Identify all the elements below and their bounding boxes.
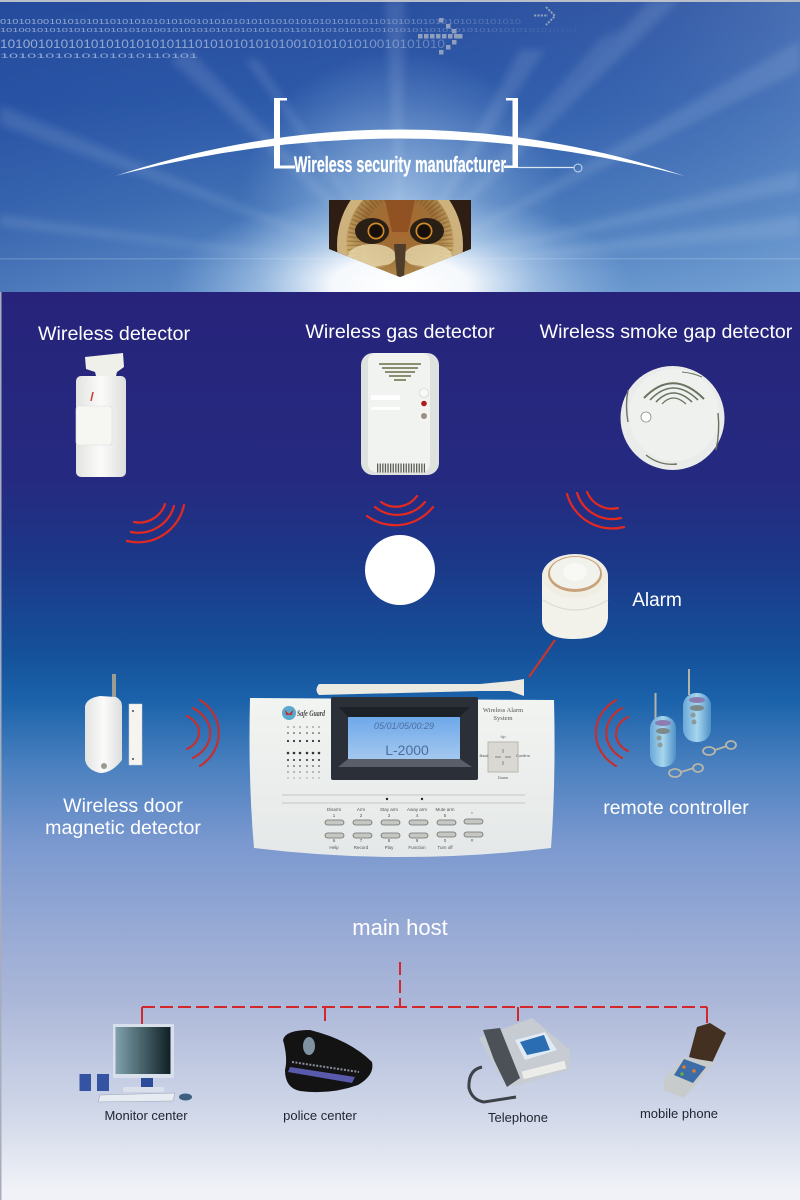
- panel: main host device: 05/01/05/00:29: [374, 721, 434, 731]
- icon: red signal waves: [367, 496, 433, 525]
- panel: mobile phone: [640, 1023, 726, 1121]
- title: wireless security manufacturer: Wireless security manufacturer: [294, 152, 506, 177]
- panel: telephone: [469, 1018, 570, 1125]
- heading: wireless detector: Wireless detector: [38, 323, 190, 345]
- keypad: 6: [333, 838, 336, 843]
- keypad: 0: [444, 838, 447, 843]
- panel: monitor center: [80, 1024, 192, 1123]
- keypad: Stay arm: [380, 807, 398, 812]
- icon: siren: [542, 554, 608, 639]
- icon: dotted arrow decoration: [418, 7, 555, 54]
- icon: red signal waves: [127, 504, 184, 542]
- keypad: 9: [416, 838, 419, 843]
- icon: red signal waves: [567, 492, 624, 528]
- keypad: 1: [333, 813, 336, 818]
- keypad: Mute arm: [435, 807, 455, 812]
- LCD display: [331, 697, 478, 780]
- icon: PIR motion detector: [76, 353, 126, 477]
- panel: wireless detector: [38, 323, 190, 542]
- heading: main host: main host: [352, 915, 448, 940]
- keypad: Arm: [357, 807, 365, 812]
- label: monitor center: Monitor center: [104, 1108, 188, 1123]
- label: telephone: Telephone: [488, 1110, 548, 1125]
- binary code decoration: 1010101010101010110101: [0, 54, 200, 60]
- icon: remote key fobs: [650, 669, 736, 777]
- icon: red signal waves: [187, 700, 219, 766]
- panel: main host device: [250, 679, 555, 940]
- panel: main host device: Up: [500, 734, 506, 739]
- logo: [282, 706, 296, 720]
- heading: wireless smoke gap detector: Wireless smoke gap detector: [540, 321, 793, 343]
- keypad: Record: [354, 845, 369, 850]
- heading: remote controller: remote controller: [603, 797, 749, 819]
- host body: [250, 698, 555, 857]
- keypad: [327, 807, 474, 850]
- panel: wireless gas detector: [305, 321, 495, 525]
- panel: main host device: Safe Guard: [297, 709, 326, 718]
- panel: main host device: Back: [480, 753, 488, 758]
- icon: white center circle: [365, 535, 435, 605]
- keypad: #: [471, 838, 474, 843]
- antenna: [316, 679, 524, 696]
- panel: main dark blue section: [0, 292, 800, 1200]
- keypad: Help: [329, 845, 339, 850]
- panel: remote controller: [596, 669, 749, 819]
- keypad: Turn off: [437, 845, 453, 850]
- icon: owl face: [329, 200, 471, 277]
- icon: mobile phone: [663, 1023, 726, 1098]
- heading: wireless door magnetic detector: magnetic detector: [45, 817, 201, 839]
- keypad: Play: [385, 845, 394, 850]
- keypad: 7: [360, 838, 363, 843]
- navigation pad: [488, 742, 518, 772]
- system label: Wireless Alarm: [483, 707, 523, 714]
- panel: main host device: Confirm: [516, 753, 531, 758]
- icon: smoke detector: [620, 366, 724, 470]
- keypad: Disarm: [327, 807, 341, 812]
- connector line to host: [529, 640, 555, 677]
- connector: red dashed lines: [142, 962, 707, 1024]
- binary code decoration: 10100101010101010101010111010101010101001010101010010101010: [0, 37, 445, 51]
- binary code decoration: 0101010010101010110101010101010010101010101010101010101010101101010101010101010101010: [0, 19, 521, 26]
- brackets: [274, 98, 295, 168]
- keypad: Away arm: [407, 807, 427, 812]
- keypad: 5: [444, 813, 447, 818]
- icon: telephone: [469, 1018, 570, 1102]
- panel: main host device: L-2000: [385, 742, 429, 758]
- keypad: *: [471, 811, 473, 816]
- heading: alarm: Alarm: [632, 590, 682, 611]
- panel: header banner background: [0, 0, 800, 292]
- label: police center: police center: [283, 1108, 358, 1123]
- icon: gas detector: [361, 353, 439, 475]
- icon: door magnetic sensor: [85, 674, 142, 773]
- panel: main host device: Down: [498, 775, 508, 780]
- heading: wireless door magnetic detector: Wireless door: [63, 795, 183, 817]
- binary code decoration: 1010010101010101101010101001010101010101010101011010101010101010101011010101010101010101010101: [0, 28, 578, 34]
- panel: alarm: [529, 554, 682, 677]
- keypad: Function: [408, 845, 426, 850]
- keypad: 2: [360, 813, 363, 818]
- icon: computer: [80, 1024, 192, 1102]
- panel: wireless door magnetic detector: [45, 674, 219, 839]
- white arc: [115, 130, 685, 176]
- heading: wireless gas detector: Wireless gas detector: [305, 321, 495, 343]
- label: mobile phone: mobile phone: [640, 1106, 718, 1121]
- keypad: 8: [388, 838, 391, 843]
- system label: System: [493, 715, 513, 722]
- panel: police center: [283, 1030, 372, 1123]
- title: wireless security manufacturer: [115, 98, 685, 177]
- panel: wireless smoke gap detector: [540, 321, 793, 528]
- speaker grille: [287, 726, 320, 778]
- icon: police cap: [283, 1030, 372, 1092]
- binary code decoration: [0, 19, 578, 60]
- keypad: 4: [416, 813, 419, 818]
- divider strip: [282, 795, 525, 803]
- keypad: 3: [388, 813, 391, 818]
- icon: red signal waves: [596, 700, 628, 766]
